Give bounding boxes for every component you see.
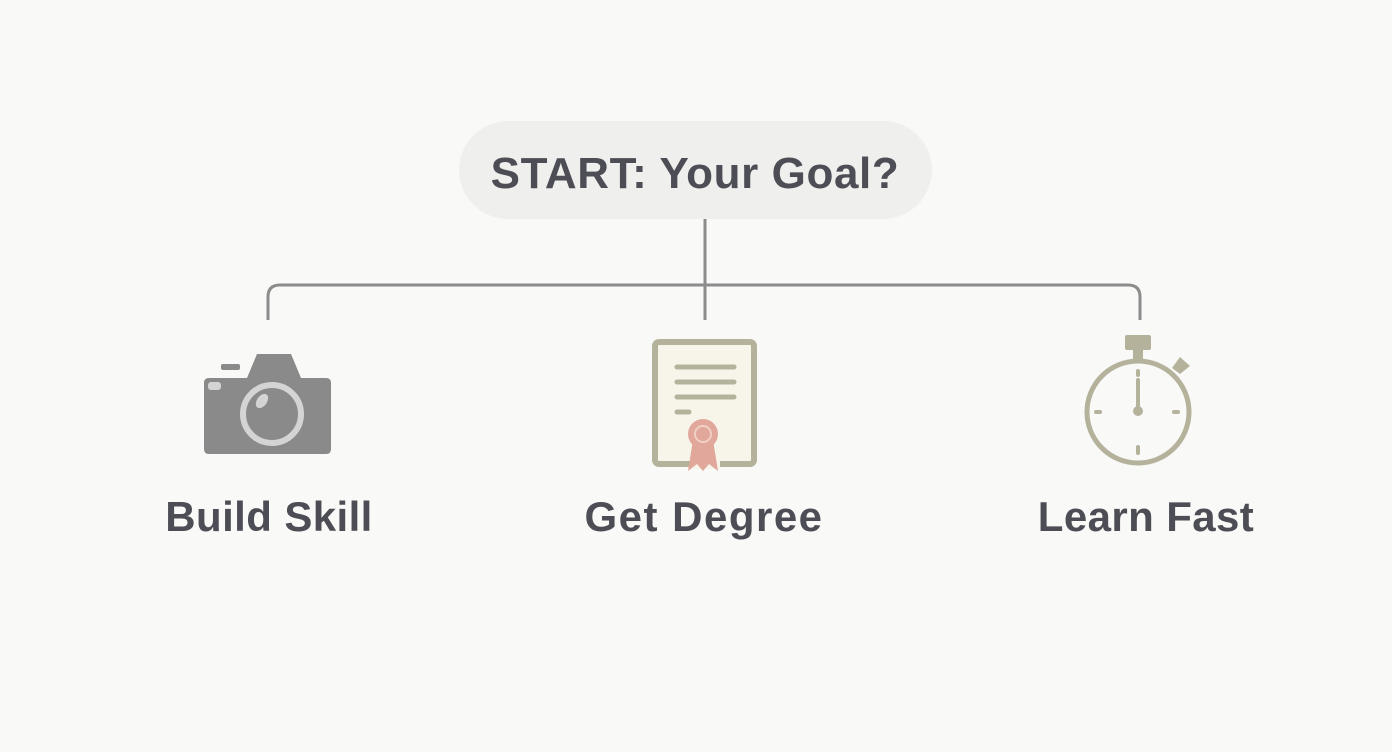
label: Learn Fast: Learn Fast: [1038, 493, 1254, 540]
label: Build Skill: Build Skill: [165, 493, 373, 540]
icon: stopwatch: [1087, 335, 1190, 463]
connector lines: [268, 219, 1140, 320]
icon: certificate: [655, 342, 754, 471]
label: Get Degree: Get Degree: [584, 493, 824, 540]
start node pill: START: Your Goal?: [491, 149, 899, 198]
start node pill: [459, 121, 932, 219]
icon: camera: [204, 354, 331, 454]
